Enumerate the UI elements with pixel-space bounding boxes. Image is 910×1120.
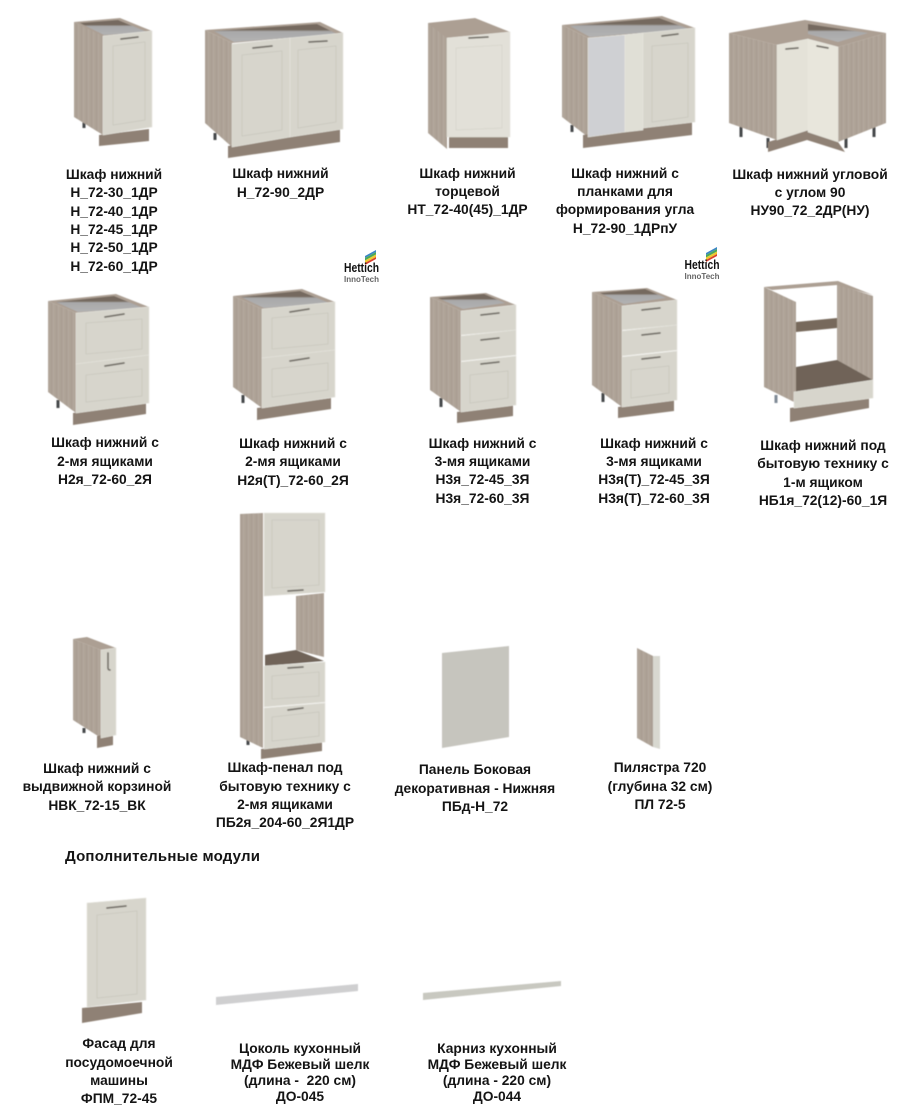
illustration: cornice strip — [423, 981, 561, 1000]
caption: one-door cabinet: Н_72-60_1ДР — [70, 259, 158, 274]
cabinet item: two-door base cabinet — [205, 22, 343, 200]
illustration: three-drawer cabinet — [430, 293, 516, 423]
item: decorative side panel — [395, 646, 555, 814]
caption: plinth: ДО-045 — [276, 1089, 324, 1104]
caption: corner cabinet — [732, 167, 888, 218]
caption: three-drawer cabinet: 3-мя ящиками — [435, 454, 530, 469]
caption: appliance base cabinet: НБ1я_72(12)-60_1Я — [759, 493, 887, 508]
caption: cabinet with planks: формирования угла — [556, 202, 694, 217]
illustration: dishwasher facade — [82, 898, 146, 1023]
cabinet item: appliance base cabinet — [757, 281, 889, 508]
caption: dishwasher facade: ФПМ_72-45 — [81, 1091, 157, 1106]
caption: three-drawer cabinet Т — [598, 436, 710, 506]
cabinet item: three drawers Т — [592, 288, 710, 506]
caption: pilaster: (глубина 32 см) — [608, 779, 712, 794]
caption: pull-out basket cabinet: НВК_72-15_ВК — [48, 798, 146, 813]
caption: plinth: (длина - 220 см) — [244, 1073, 356, 1088]
caption: tall appliance cabinet: 2-мя ящиками — [237, 797, 333, 812]
caption: corner cabinet: НУ90_72_2ДР(НУ) — [750, 203, 870, 218]
caption: dishwasher facade: Фасад для — [82, 1036, 156, 1051]
caption: cornice: МДФ Бежевый шелк — [428, 1057, 567, 1072]
cabinet item: three drawers — [429, 293, 537, 506]
caption: cornice: (длина - 220 см) — [443, 1073, 551, 1088]
cabinet item: one-door base cabinet — [66, 18, 162, 274]
illustration: pilaster — [637, 648, 660, 749]
logo: Hettich InnoTech (row 2 right): Hettich — [684, 257, 720, 272]
caption: three-drawer cabinet: Н3я_72-60_3Я — [436, 491, 529, 506]
caption: side panel: декоративная - Нижняя — [395, 781, 555, 796]
cabinet item: end cabinet — [407, 18, 528, 217]
caption: side panel: Панель Боковая — [419, 762, 531, 777]
caption: end cabinet: торцевой — [435, 184, 500, 199]
caption: three-drawer cabinet Т: Н3я(Т)_72-60_3Я — [598, 491, 710, 506]
caption: cornice — [428, 1041, 567, 1104]
item: kitchen plinth — [216, 984, 370, 1104]
cabinet item: two drawers — [48, 294, 159, 487]
illustration: cabinet with planks — [562, 16, 695, 148]
caption: three-drawer cabinet Т: Н3я(Т)_72-45_3Я — [598, 472, 710, 487]
caption: pull-out basket cabinet — [23, 761, 171, 813]
caption: pilaster: ПЛ 72-5 — [634, 797, 686, 812]
caption: pilaster — [608, 760, 712, 812]
caption: cabinet with planks: Н_72-90_1ДРпУ — [573, 221, 678, 236]
caption: pull-out basket cabinet: Шкаф нижний с — [43, 761, 151, 776]
caption: three-drawer cabinet: Шкаф нижний с — [429, 436, 537, 451]
caption: side panel — [395, 762, 555, 814]
caption: one-door cabinet: Н_72-45_1ДР — [70, 222, 158, 237]
cabinet item: two drawers Т — [233, 289, 349, 488]
cabinet item: tall appliance cabinet — [216, 513, 354, 830]
illustration: side panel — [442, 646, 509, 748]
caption: two-drawer cabinet: Н2я_72-60_2Я — [58, 472, 152, 487]
caption: pull-out basket cabinet: выдвижной корзиной — [23, 779, 171, 794]
caption: one-door cabinet: Н_72-50_1ДР — [70, 240, 158, 255]
caption: dishwasher facade: посудомоечной — [65, 1055, 173, 1070]
item: pilaster — [608, 648, 712, 812]
caption: three-drawer cabinet: Н3я_72-45_3Я — [436, 472, 529, 487]
caption: appliance base cabinet: 1-м ящиком — [783, 475, 863, 490]
caption: plinth: МДФ Бежевый шелк — [231, 1057, 370, 1072]
caption: one-door cabinet: Н_72-30_1ДР — [70, 185, 158, 200]
caption: two-drawer cabinet Т: Н2я(Т)_72-60_2Я — [237, 473, 349, 488]
caption: three-drawer cabinet Т: 3-мя ящиками — [606, 454, 702, 469]
illustration: one-door cabinet — [74, 18, 152, 146]
caption: one-door cabinet: Н_72-40_1ДР — [70, 204, 158, 219]
illustration: plinth strip — [216, 984, 358, 1005]
caption: one-door cabinet: Шкаф нижний — [66, 167, 162, 182]
caption: cabinet with planks: Шкаф нижний с — [571, 166, 679, 181]
caption: end cabinet: Шкаф нижний — [419, 166, 516, 181]
caption: two-door cabinet — [232, 166, 329, 200]
caption: cabinet with planks: планками для — [577, 184, 673, 199]
illustration: two-door cabinet — [205, 22, 343, 158]
logo: Hettich InnoTech (row 2 left) — [344, 250, 379, 284]
caption: corner cabinet: Шкаф нижний угловой — [732, 167, 888, 182]
caption: plinth — [231, 1041, 370, 1104]
caption: two-drawer cabinet: 2-мя ящиками — [57, 454, 153, 469]
item: dishwasher facade — [65, 898, 173, 1106]
logo: Hettich InnoTech (row 2 right) — [684, 247, 720, 281]
caption: two-door cabinet: Н_72-90_2ДР — [237, 185, 324, 200]
caption: two-drawer cabinet Т: Шкаф нижний с — [239, 436, 347, 451]
logo: Hettich InnoTech (row 2 right): InnoTech — [684, 272, 720, 281]
caption: two-drawer cabinet: Шкаф нижний с — [51, 435, 159, 450]
caption: appliance base cabinet: бытовую технику с — [757, 456, 889, 471]
caption: two-drawer cabinet Т — [237, 436, 349, 488]
illustration: appliance base cabinet — [764, 281, 873, 422]
caption: two-door cabinet: Шкаф нижний — [232, 166, 329, 181]
caption: pilaster: Пилястра 720 — [614, 760, 707, 775]
caption: three-drawer cabinet — [429, 436, 537, 506]
caption: cabinet with planks — [556, 166, 694, 236]
cabinet item: pull-out basket — [23, 637, 171, 813]
caption: tall appliance cabinet: ПБ2я_204-60_2Я1ДР — [216, 815, 354, 830]
heading: additional modules: Дополнительные модули — [65, 848, 260, 865]
caption: end cabinet — [407, 166, 528, 217]
caption: end cabinet: НТ_72-40(45)_1ДР — [407, 202, 528, 217]
caption: dishwasher facade: машины — [90, 1073, 148, 1088]
illustration: three-drawer cabinet Т — [592, 288, 677, 418]
caption: two-drawer cabinet — [51, 435, 159, 487]
illustration: two-drawer cabinet — [48, 294, 149, 425]
illustration: two-drawer cabinet Т — [233, 289, 335, 420]
caption: corner cabinet: с углом 90 — [775, 185, 846, 200]
caption: two-drawer cabinet Т: 2-мя ящиками — [245, 454, 341, 469]
item: kitchen cornice — [423, 981, 567, 1104]
cabinet item: cabinet with corner planks — [556, 16, 695, 236]
caption: three-drawer cabinet Т: Шкаф нижний с — [600, 436, 708, 451]
illustration: corner cabinet — [729, 20, 886, 152]
illustration: pull-out basket cabinet — [73, 637, 116, 748]
caption: dishwasher facade — [65, 1036, 173, 1106]
illustration: end cabinet — [428, 18, 510, 149]
caption: tall appliance cabinet: Шкаф-пенал под — [227, 760, 343, 775]
logo: Hettich InnoTech (row 2 left): Hettich — [344, 260, 379, 275]
caption: cornice: ДО-044 — [473, 1089, 521, 1104]
illustration: tall appliance cabinet — [240, 513, 325, 759]
caption: cornice: Карниз кухонный — [437, 1041, 557, 1056]
caption: tall appliance cabinet: бытовую технику с — [219, 779, 351, 794]
caption: side panel: ПБд-Н_72 — [442, 799, 508, 814]
caption: appliance base cabinet — [757, 438, 889, 508]
caption: appliance base cabinet: Шкаф нижний под — [760, 438, 886, 453]
cabinet item: corner cabinet — [729, 20, 888, 218]
caption: one-door cabinet — [66, 167, 162, 274]
caption: tall appliance cabinet — [216, 760, 354, 830]
caption: plinth: Цоколь кухонный — [239, 1041, 361, 1056]
logo: Hettich InnoTech (row 2 left): InnoTech — [344, 275, 379, 284]
